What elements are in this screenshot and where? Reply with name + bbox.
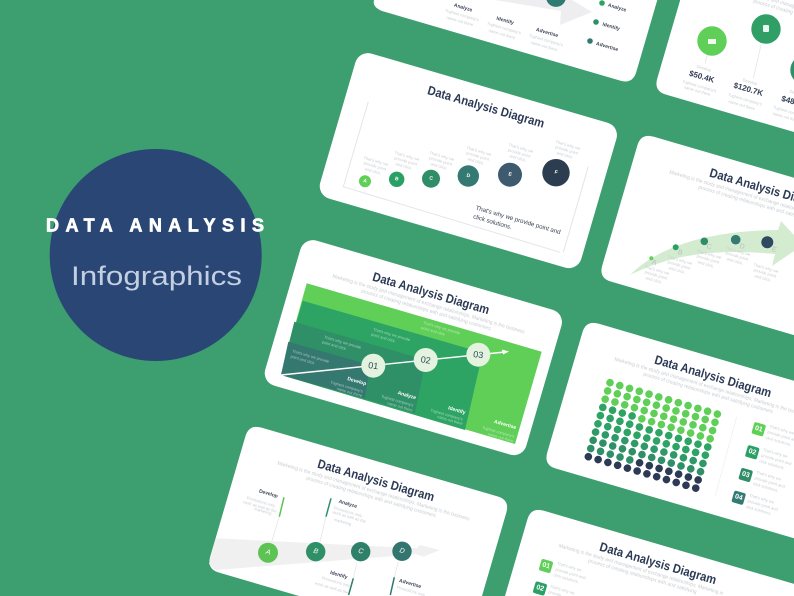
letters: B: [677, 249, 684, 257]
markers 01 02 03: 03: [473, 349, 484, 360]
letters: [651, 243, 778, 267]
captions: and click.: [697, 259, 715, 269]
circle captions: and click.: [467, 156, 485, 166]
heading: Data Analysis Diagram: [426, 83, 546, 131]
circle captions: provide point: [394, 155, 418, 167]
labels: Develop: [258, 488, 278, 500]
numbered list: click solutions.: [752, 481, 779, 493]
circle captions: provide point: [466, 150, 490, 162]
circles: F: [554, 169, 558, 176]
circle captions: and click.: [395, 161, 413, 171]
panel: top right revenue circles: [656, 0, 794, 132]
numbered list: That's why we: [556, 561, 583, 573]
title: data analysis: DATA ANALYSIS: [46, 216, 264, 236]
curved arrow: [630, 221, 794, 275]
captions: [644, 245, 780, 285]
captions: That's why we: [696, 248, 723, 260]
step labels: Tughest company's: [528, 33, 564, 47]
top notes: That's why we provide: [373, 327, 411, 342]
labels: Promotions only: [246, 495, 277, 508]
numbered list: [533, 559, 587, 596]
numbered list: provide point and: [754, 475, 786, 489]
grey arrow: [495, 0, 592, 25]
step labels: Tughest company's: [444, 8, 480, 22]
labels: Advertise: [398, 578, 422, 590]
step labels: Analyze: [453, 2, 473, 14]
circle captions: That's why we: [466, 145, 493, 157]
captions: provide point: [644, 269, 669, 281]
numbered list: That's why we: [762, 447, 789, 459]
subtitle: Marketing is the study and management of exchange relationships. Marketing is the business: [332, 274, 526, 336]
numbered list: provide point and: [747, 498, 779, 512]
circle captions: provide point: [429, 155, 453, 167]
panel: growing circles A to F: [317, 50, 620, 271]
step layers: [281, 283, 542, 444]
circles with icons: [697, 14, 794, 85]
subtitle: Marketing is the study and management of exchange relationships. Marketing is the business: [277, 461, 471, 523]
step labels: [330, 376, 517, 443]
captions: and click.: [668, 265, 686, 275]
circle captions: That's why we: [394, 150, 421, 162]
step labels: Tughest company's: [486, 21, 522, 35]
circle captions: provide point: [363, 160, 388, 172]
circles: B: [312, 548, 319, 556]
numbered list: That's why we: [769, 424, 794, 436]
numbered list: click solutions.: [765, 435, 792, 447]
circles: E: [508, 171, 513, 178]
step labels: Tughest company's: [330, 379, 364, 394]
labels: Promotions only: [321, 575, 352, 588]
heading: Data Analysis Diagram: [653, 353, 773, 400]
numbered list: click solutions.: [745, 504, 772, 516]
captions: and click.: [754, 273, 772, 283]
numbered list: 02: [535, 584, 545, 593]
labels: work as well as the: [332, 509, 367, 524]
step labels: Identify: [447, 405, 466, 416]
step labels: Tughest company's: [381, 393, 414, 408]
labels: Analyze: [338, 499, 358, 510]
subtitle: process of creating relationships with and satisfying customers.: [360, 289, 493, 332]
legend: Identify: [602, 22, 621, 32]
value labels: $50.4K: [688, 69, 716, 85]
navy title circle: [46, 149, 264, 361]
value labels: Tughest company's: [682, 79, 717, 93]
captions: provide point: [753, 267, 778, 279]
circle D: [546, 0, 566, 7]
captions: and click.: [645, 275, 663, 285]
step labels: Tughest company's: [430, 407, 464, 422]
labels: work as well as the: [243, 499, 278, 514]
panel: bottom right list: [505, 510, 794, 596]
step labels: Advertise: [493, 419, 517, 431]
panel: top card with arrow and legend: [374, 0, 657, 81]
numbered list: 03: [741, 471, 751, 479]
captions: and click.: [726, 256, 744, 266]
step labels: [444, 2, 564, 52]
step labels: name out there: [336, 386, 363, 398]
labels: marketing: [333, 517, 353, 527]
numbered list: 04: [734, 493, 744, 502]
rising arrow: [281, 350, 509, 375]
captions: provide point: [725, 250, 750, 262]
subtitle: process of creating relationships with and satisfying customers.: [642, 372, 775, 415]
axes: [343, 102, 588, 252]
step labels: Develop: [347, 376, 367, 387]
top notes: point and click: [421, 325, 446, 337]
numbered list: [731, 422, 794, 516]
circle captions: That's why we: [555, 139, 582, 151]
circle captions: That's why we: [508, 142, 535, 154]
numbered list: That's why we: [756, 470, 782, 482]
numbered list: That's why we: [749, 493, 775, 505]
step labels: name out there: [487, 431, 514, 443]
markers 01 02 03: 01: [368, 360, 379, 371]
letters: A: [651, 259, 658, 267]
circle captions: and click.: [364, 166, 382, 176]
value labels: name out there: [728, 99, 756, 111]
heading: Data Analysis Diagram: [371, 270, 491, 317]
top notes: That's why we provide: [324, 334, 362, 350]
legend: [587, 0, 627, 53]
circles: [359, 159, 570, 188]
circle captions: [363, 139, 582, 176]
panel: curved arrow: [601, 136, 794, 335]
numbered list: 02: [748, 448, 757, 457]
markers 01 02 03: [361, 343, 490, 378]
callout text: That's why we provide point and: [475, 205, 562, 236]
value labels: Tughest company's: [727, 92, 763, 107]
value labels: [682, 64, 794, 123]
dot matrix chart: [588, 383, 718, 488]
divider: [715, 417, 737, 497]
step labels: name out there: [446, 15, 475, 27]
circles: [258, 542, 412, 563]
labels: Promotions only: [333, 505, 364, 518]
circles: C: [428, 175, 434, 182]
connector lines: [705, 45, 761, 78]
numbered list: click solutions.: [759, 458, 785, 471]
subtitle: infographics: Infographics: [71, 261, 242, 291]
captions: provide point: [667, 259, 692, 271]
circle captions: That's why we: [429, 150, 456, 162]
circle captions: provide point: [555, 144, 579, 156]
step labels: name out there: [387, 400, 413, 413]
top notes: [290, 320, 461, 365]
circle captions: and click.: [509, 153, 527, 163]
subtitle: process of creating relationships with and satisfying: [587, 558, 697, 596]
circles: D: [399, 547, 405, 555]
top notes: point and click: [322, 339, 347, 351]
captions: That's why we: [644, 264, 671, 276]
step labels: name out there: [488, 28, 517, 40]
step labels: Identify: [496, 16, 515, 26]
step labels: name out there: [437, 414, 463, 426]
panel: timeline A to D: [209, 427, 507, 596]
numbered list: provide point and: [761, 453, 793, 466]
letters: E: [771, 246, 778, 254]
dots: [649, 235, 773, 260]
letters: D: [739, 243, 745, 251]
legend: Advertise: [595, 41, 619, 53]
top notes: That's why we provide: [292, 348, 330, 364]
numbered list: That's why we: [549, 584, 576, 596]
grey arrow: [209, 538, 440, 570]
panel: terraced steps: [262, 237, 565, 458]
numbered list: provide point and: [555, 567, 587, 580]
captions: provide point: [696, 253, 721, 265]
labels: Identify: [329, 570, 348, 581]
labels: marketing: [254, 506, 273, 516]
step labels: name out there: [530, 40, 559, 52]
letters: C: [706, 243, 712, 251]
circle captions: and click.: [556, 150, 574, 160]
markers 01 02 03: 02: [420, 354, 431, 366]
subtitle: process of creating relationships with and satisfying customers.: [305, 476, 438, 519]
circle captions: That's why we: [363, 155, 390, 167]
labels: [243, 488, 427, 596]
labels: work as well as the: [314, 580, 350, 595]
value labels: Develop: [742, 77, 759, 86]
value labels: $120.7K: [733, 81, 764, 98]
circles: B: [394, 176, 400, 183]
callout text: click solutions.: [472, 213, 513, 231]
circles: C: [357, 548, 365, 556]
numbered list: 01: [541, 562, 551, 570]
numbered list: 01: [754, 425, 764, 434]
captions: That's why we: [725, 245, 752, 257]
step labels: Analyze: [397, 390, 417, 401]
step labels: Tughest company's: [482, 425, 515, 439]
circles: D: [466, 173, 471, 179]
heading: Data Analysis Diagram: [598, 540, 718, 587]
step labels: Advertise: [535, 27, 559, 39]
numbered list: click solutions.: [553, 572, 580, 584]
captions: That's why we: [753, 262, 780, 274]
circle captions: provide point: [507, 147, 532, 159]
top notes: point and click: [371, 332, 396, 343]
legend: Analyze: [607, 2, 627, 14]
connector lines: [272, 497, 398, 595]
top notes: point and click: [290, 354, 315, 365]
circles: A: [264, 548, 272, 557]
value labels: name out there: [683, 84, 712, 97]
heading: Data Analysis Diagram: [316, 457, 436, 504]
circle captions: and click.: [430, 161, 448, 171]
circles: A: [362, 178, 368, 185]
top notes: That's why we provide: [423, 320, 461, 335]
value labels: Develop: [696, 64, 713, 73]
panel: dot matrix: [546, 323, 794, 538]
captions: That's why we: [667, 254, 694, 266]
